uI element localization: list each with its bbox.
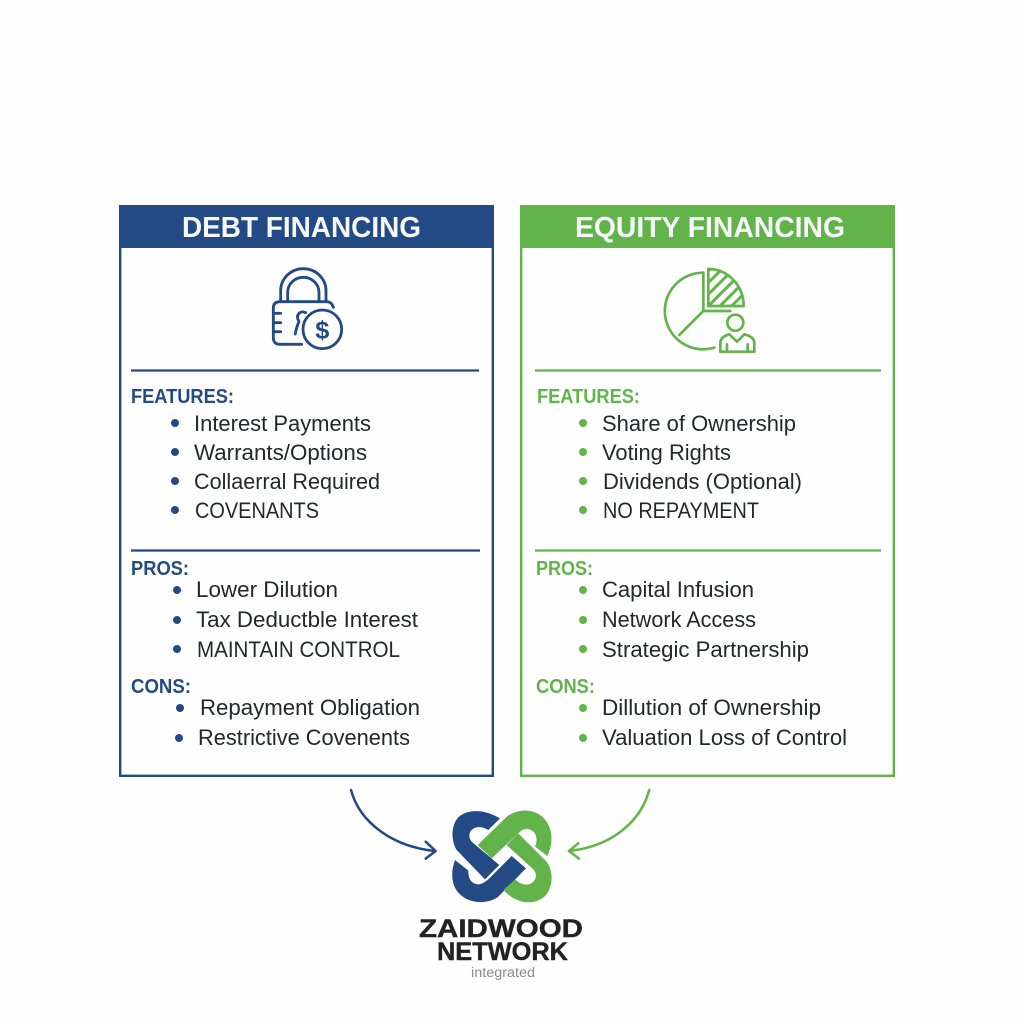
debt panel frame (120, 206, 493, 776)
equity cons list (536, 676, 847, 750)
equity features list: Dividends (Optional) (603, 469, 802, 494)
icon: pie chart with person (665, 265, 754, 352)
debt features list (131, 386, 380, 523)
debt pros list: MAINTAIN CONTROL (197, 637, 400, 662)
arrow: debt to logo (351, 790, 436, 859)
debt header bar (119, 205, 494, 248)
logo mark: interlocking links (452, 810, 552, 902)
panel: debt financing (119, 205, 494, 776)
equity features list: FEATURES: (537, 386, 640, 408)
equity features list (537, 386, 802, 523)
icon: padlock with dollar coin (273, 269, 342, 349)
logo wordmark: integrated (471, 965, 535, 980)
equity features list: Voting Rights (602, 440, 731, 465)
debt heading: DEBT FINANCING (182, 212, 421, 244)
equity pros list: Network Access (602, 607, 756, 632)
logo wordmark (419, 915, 583, 980)
debt pros list (131, 558, 419, 662)
debt cons list: CONS: (131, 676, 191, 698)
debt pros list: Tax Deductble Interest (196, 607, 419, 632)
debt cons list: Restrictive Covenents (198, 725, 410, 750)
equity features list: Share of Ownership (602, 411, 796, 436)
debt features list: FEATURES: (131, 386, 234, 408)
equity heading: EQUITY FINANCING (575, 212, 845, 244)
equity cons list: Dillution of Ownership (602, 695, 821, 720)
icon: padlock with dollar coin: $ (315, 316, 329, 344)
equity pros list: PROS: (536, 558, 593, 580)
logo wordmark: NETWORK (437, 938, 568, 966)
debt features list: Interest Payments (194, 411, 371, 436)
equity pros list: Capital Infusion (602, 577, 754, 602)
debt features list: COVENANTS (195, 498, 319, 523)
debt pros list: PROS: (131, 558, 189, 580)
debt cons list: Repayment Obligation (200, 695, 420, 720)
debt pros list: Lower Dilution (196, 577, 338, 602)
equity cons list: CONS: (536, 676, 595, 698)
equity pros list (536, 558, 809, 662)
equity panel frame (521, 206, 894, 776)
debt features list: Collaerral Required (194, 469, 380, 494)
debt features list: Warrants/Options (194, 440, 367, 465)
equity pros list: Strategic Partnership (602, 637, 809, 662)
panel: equity financing (520, 205, 895, 776)
arrow: equity to logo (569, 790, 649, 859)
debt cons list (131, 676, 420, 750)
equity header bar (520, 205, 895, 248)
equity features list: NO REPAYMENT (603, 498, 759, 523)
equity cons list: Valuation Loss of Control (602, 725, 847, 750)
logo wordmark: ZAIDWOOD (419, 915, 583, 943)
